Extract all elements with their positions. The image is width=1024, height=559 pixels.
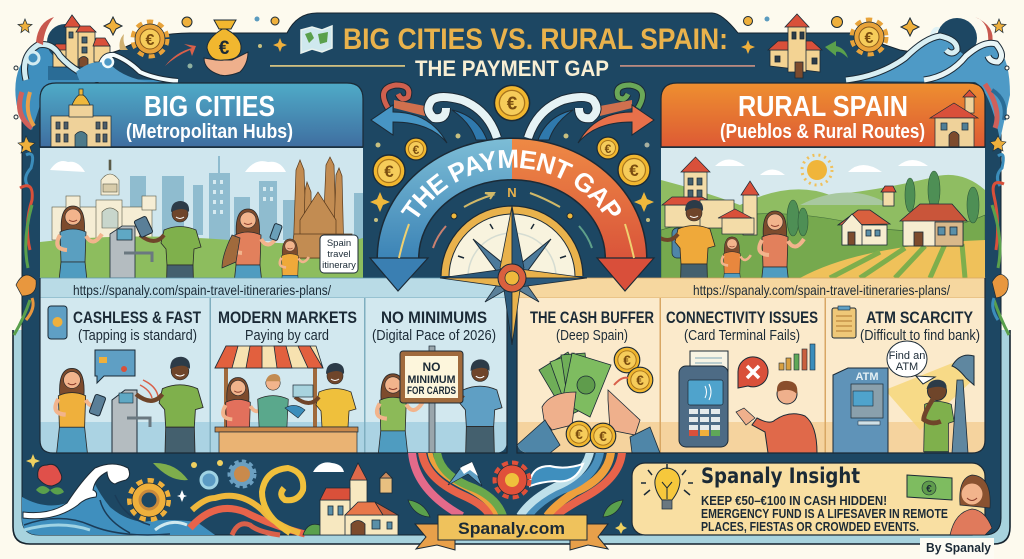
- decoration: top-left corner waves and village: [14, 15, 178, 296]
- icons: bottom left flower, gears and leaves: [26, 454, 254, 519]
- illustration: lonely atm: ATM: [855, 371, 879, 383]
- subheading: (Difficult to find bank): [860, 327, 980, 344]
- hilltop village: [662, 157, 759, 235]
- url strip: rural spain: [510, 278, 985, 298]
- illustration: banknotes and hands: [517, 347, 660, 453]
- error bubble: [738, 357, 768, 388]
- illustration: banknotes and hands: €: [599, 429, 607, 444]
- farmhouses: [838, 186, 967, 246]
- subheading: (Deep Spain): [556, 327, 628, 344]
- card: connectivity issues: [666, 308, 818, 453]
- historic palace: [52, 160, 156, 240]
- euro coins: €: [413, 143, 420, 157]
- subheading: pueblos and rural routes: (Pueblos & Rural Routes): [720, 121, 925, 143]
- panel header: big cities: [40, 83, 363, 147]
- euro coins: €: [507, 93, 518, 114]
- arc band: [398, 159, 626, 258]
- compass: [440, 185, 587, 348]
- icon: euro gear top right: [852, 20, 886, 54]
- speech box: spain travel itinerary: Spain: [327, 238, 351, 249]
- title: [270, 23, 755, 81]
- swirl and arrow right: [528, 85, 654, 143]
- sun: [802, 155, 832, 185]
- euro coins: €: [384, 162, 394, 181]
- icon: light bulb: [641, 464, 693, 509]
- park ground: [40, 236, 363, 278]
- payment kiosk: [110, 226, 152, 278]
- speech box: spain travel itinerary: travel: [327, 249, 351, 260]
- hills: [661, 174, 985, 230]
- icon: euro gear top left: [133, 22, 167, 56]
- icon: clipboard: [832, 306, 856, 338]
- illustration: lonely atm: [833, 341, 975, 467]
- credit tag: by spanaly: [920, 538, 994, 559]
- title: BIG CITIES VS. RURAL SPAIN:: [343, 23, 728, 56]
- ribbons and spiral: [190, 508, 305, 534]
- icons: mountain, wave and leaves: [408, 462, 623, 517]
- subheading: Paying by card: [245, 327, 329, 344]
- illustration: card terminal failure: [679, 344, 817, 453]
- icon: euro gear top right: €: [865, 30, 874, 47]
- speech bubble: find an atm: Find an: [889, 350, 925, 362]
- speech box: spain travel itinerary: [320, 235, 358, 273]
- heading: THE CASH BUFFER: [530, 308, 654, 327]
- panel: big cities tips: [40, 298, 507, 469]
- euro coins: €: [629, 161, 639, 180]
- heading: big cities: BIG CITIES: [144, 91, 275, 123]
- center: the payment gap arch: THE PAYMENT GAP: [400, 150, 621, 218]
- title: THE PAYMENT GAP: [415, 56, 609, 81]
- person searching: [924, 380, 954, 467]
- icon: smartphone: [48, 306, 67, 339]
- icon: banknote: €: [926, 484, 932, 495]
- subheading: metropolitan hubs: (Metropolitan Hubs): [126, 121, 293, 143]
- signal bars: [779, 344, 815, 370]
- icon: map: [301, 26, 332, 53]
- url strip: rural spain: https://spanaly.com/spain-travel-itineraries-plans/: [693, 282, 950, 298]
- ribbons: [20, 92, 32, 128]
- illustration: banknotes and hands: €: [623, 353, 631, 368]
- people: tourists with phones: [55, 201, 310, 278]
- icon: red gear: [495, 463, 529, 497]
- heading: NO MINIMUMS: [381, 308, 487, 327]
- panel outlines: [40, 147, 985, 453]
- heading: Spanaly Insight: [701, 464, 860, 488]
- rainbow ribbons: [412, 452, 622, 516]
- street lamp: [952, 380, 968, 453]
- scene: rural spain: [661, 148, 985, 278]
- worried person: [777, 384, 797, 404]
- center: the payment gap arch: [369, 82, 655, 345]
- icon: bottom village: [303, 462, 398, 535]
- icon: banknote: [907, 475, 952, 500]
- illustration: no minimum sign: FOR CARDS: [407, 385, 456, 397]
- card: the cash buffer: [517, 308, 660, 453]
- panel header: rural spain: [661, 83, 985, 147]
- card: modern markets: [215, 308, 358, 466]
- icon: euro gear top left: €: [146, 32, 155, 49]
- card: no minimums: [372, 312, 502, 452]
- speech box: spain travel itinerary: itinerary: [322, 260, 356, 271]
- speech bubble: find an atm: [887, 341, 935, 384]
- subheading: (Card Terminal Fails): [684, 327, 800, 344]
- heading: MODERN MARKETS: [218, 308, 357, 327]
- sparkle beside banner: [615, 522, 627, 534]
- url strip: big cities: [40, 278, 510, 298]
- icon: money bag in hands: [165, 16, 287, 76]
- url strip: big cities: https://spanaly.com/spain-travel-itineraries-plans/: [73, 282, 331, 298]
- subheading: (Digital Pace of 2026): [372, 327, 496, 344]
- body text: KEEP €50–€100 IN CASH HIDDEN!: [701, 493, 887, 508]
- callout: spanaly insight: [632, 463, 992, 535]
- compass: N: [507, 185, 517, 200]
- icon: rural house: [930, 90, 978, 147]
- arc label: [407, 168, 617, 239]
- people: travellers: [661, 200, 806, 278]
- striped field: [800, 240, 985, 278]
- sparkles and dots: [370, 134, 654, 222]
- card: cashless and fast: [48, 306, 203, 469]
- person: smiling woman: [950, 475, 992, 535]
- band ticks: [399, 224, 634, 258]
- sagrada familia: [290, 157, 352, 258]
- decoration: top-right village and waves: [741, 14, 1010, 298]
- panel: rural spain tips: [517, 298, 985, 467]
- illustration: no minimum sign: NO: [422, 360, 440, 374]
- compass rose: [485, 272, 516, 302]
- illustration: tap to pay: [53, 350, 204, 452]
- decoration: bottom left waves: [22, 464, 305, 535]
- scene: big cities: [40, 148, 363, 278]
- swirl and arrow left: [371, 85, 497, 143]
- banner: spanaly.com: [415, 515, 608, 550]
- skyline: [130, 156, 364, 243]
- illustration: banknotes and hands: €: [575, 427, 583, 442]
- euro coins: €: [605, 142, 612, 156]
- euro coins: [373, 85, 650, 187]
- banner: spanaly.com: Spanaly.com: [458, 519, 565, 538]
- body text: EMERGENCY FUND IS A LIFESAVER IN REMOTE: [701, 506, 948, 521]
- illustration: no minimum sign: MINIMUM: [408, 374, 456, 386]
- arrowheads: [370, 258, 428, 291]
- heading: ATM SCARCITY: [866, 308, 974, 327]
- subheading: (Tapping is standard): [78, 327, 197, 344]
- icon: palace: [51, 89, 111, 147]
- credit tag: by spanaly: By Spanaly: [926, 541, 991, 555]
- icon: money bag in hands: €: [219, 38, 230, 59]
- heading: CASHLESS & FAST: [73, 308, 201, 327]
- speech bubble: find an atm: ATM: [896, 361, 918, 373]
- wave crests: [24, 44, 100, 80]
- body text: PLACES, FIESTAS OR CROWDED EVENTS.: [701, 519, 919, 534]
- decoration: leaves on frame sides: [14, 298, 1009, 335]
- body text: [701, 493, 948, 534]
- illustration: banknotes and hands: €: [636, 373, 644, 388]
- heading: rural spain: RURAL SPAIN: [738, 91, 908, 123]
- cypress trees: [787, 171, 979, 236]
- card: atm scarcity: [832, 306, 980, 467]
- illustration: market stall: [215, 346, 358, 466]
- heading: CONNECTIVITY ISSUES: [666, 308, 818, 327]
- illustration: no minimum sign: [374, 346, 502, 452]
